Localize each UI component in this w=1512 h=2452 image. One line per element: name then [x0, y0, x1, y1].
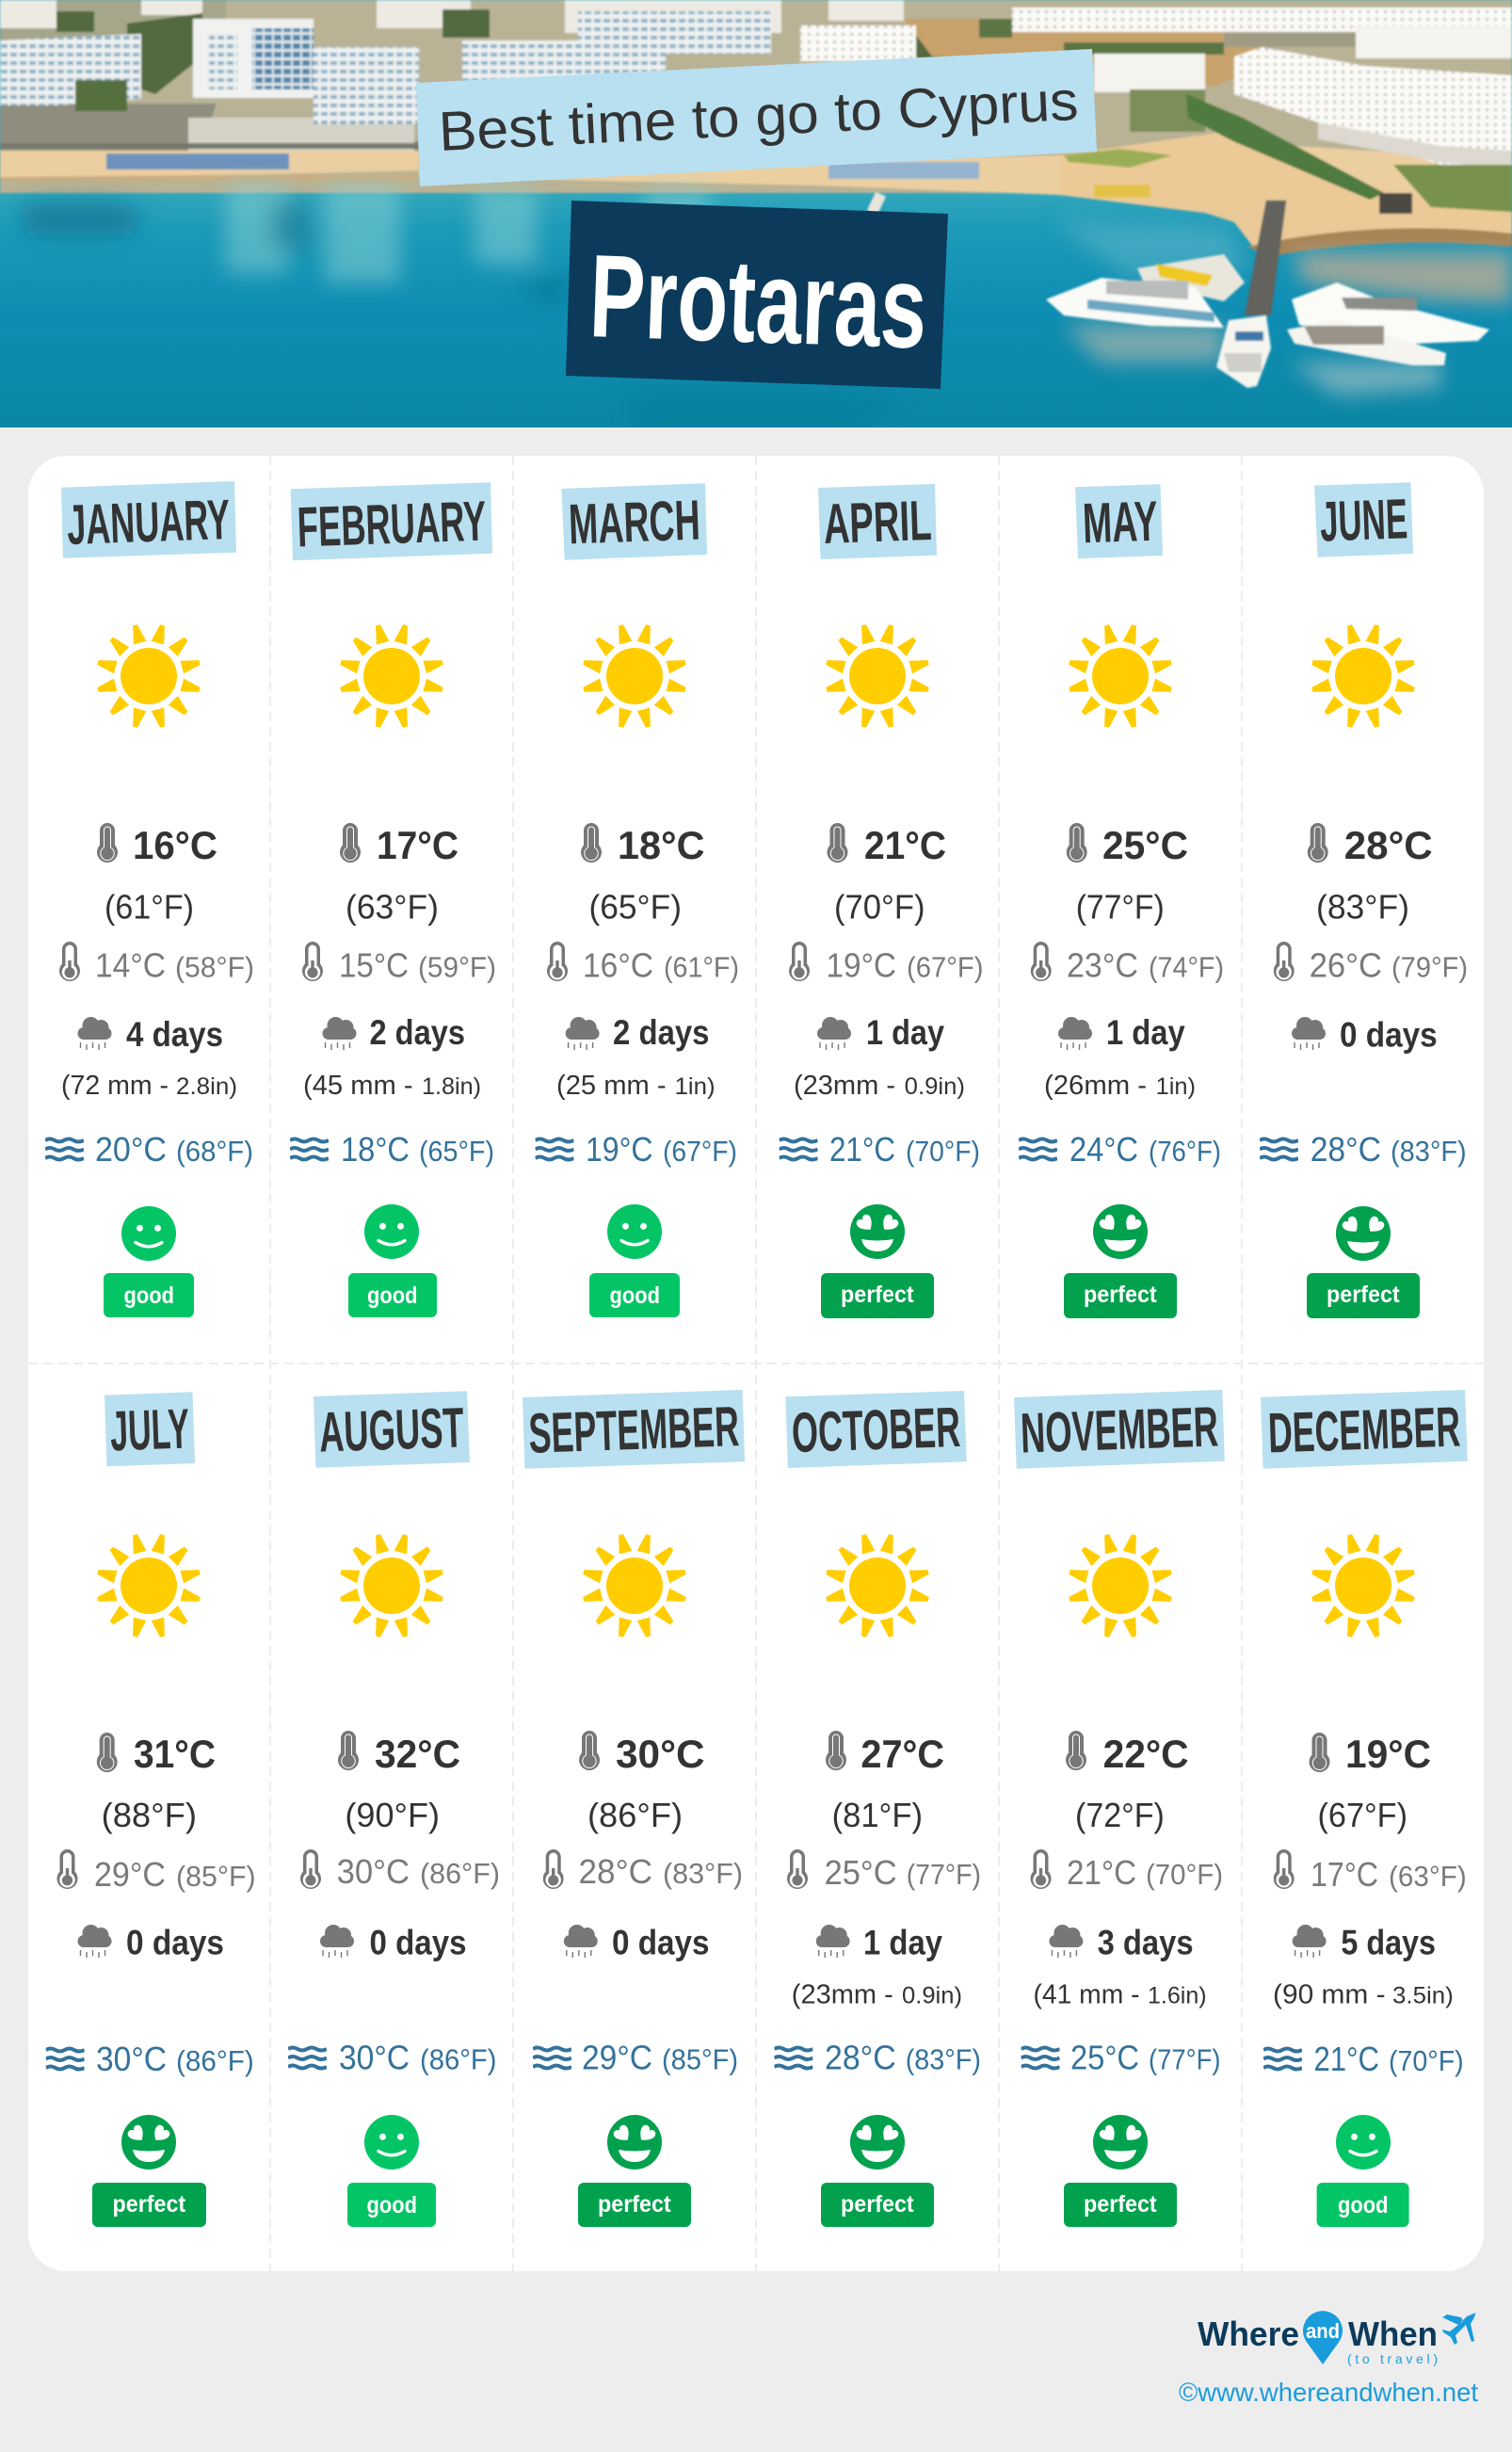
rating: perfect — [1064, 2115, 1177, 2227]
high temperature — [827, 823, 946, 927]
icon: sun — [582, 1533, 687, 1638]
rainfall: (45 mm - — [303, 1071, 413, 1101]
month heading — [1314, 482, 1413, 557]
month: August — [288, 1391, 500, 2227]
rainfall: 1.6in) — [1148, 1983, 1207, 2009]
sea temperature — [290, 1130, 494, 1169]
sea temperature: (65°F) — [419, 1135, 494, 1168]
high temperature: (65°F) — [589, 887, 682, 927]
month heading: APRIL — [823, 489, 933, 556]
rating: good — [589, 1204, 680, 1317]
sea temperature — [535, 1130, 737, 1169]
sea temperature: (76°F) — [1149, 1135, 1221, 1168]
sea temperature: 29°C — [582, 2039, 652, 2077]
sea temperature — [1019, 1130, 1221, 1169]
low temperature: (67°F) — [907, 951, 983, 983]
low temperature: (74°F) — [1149, 951, 1224, 983]
icon: sun — [825, 623, 930, 729]
rainfall: 5 days — [1341, 1924, 1436, 1962]
rating: perfect — [821, 1204, 934, 1318]
sea temperature: (83°F) — [1391, 1135, 1467, 1168]
month heading — [818, 484, 937, 559]
month heading: NOVEMBER — [1020, 1395, 1219, 1465]
month: April — [780, 484, 983, 1318]
month heading — [61, 481, 236, 558]
high temperature — [1308, 823, 1433, 927]
high temperature: (77°F) — [1076, 887, 1165, 927]
icon: airplane — [1442, 2313, 1476, 2345]
icon: sun — [1068, 623, 1173, 729]
icon: sun — [1311, 623, 1416, 729]
month heading — [314, 1391, 470, 1468]
header photo: Protaras bay — [0, 0, 1512, 427]
low temperature — [59, 942, 254, 985]
low temperature: (83°F) — [663, 1857, 743, 1890]
month heading — [1075, 484, 1163, 558]
month: June — [1260, 482, 1468, 1318]
sea temperature — [774, 2039, 981, 2077]
low temperature: (61°F) — [664, 951, 739, 983]
sea temperature: (85°F) — [662, 2043, 738, 2076]
rainfall: 1.8in) — [422, 1073, 481, 1100]
high temperature — [1066, 1731, 1189, 1834]
month heading: OCTOBER — [791, 1395, 961, 1464]
rating: good — [104, 1206, 194, 1317]
month: May — [1019, 484, 1224, 1318]
rainfall: 2.8in) — [176, 1073, 237, 1100]
low temperature: (77°F) — [907, 1858, 981, 1891]
logo: Where and When to travel: Where — [1198, 2315, 1299, 2353]
low temperature — [543, 1849, 743, 1891]
high temperature — [1309, 1732, 1431, 1834]
low temperature: 16°C — [583, 945, 653, 985]
icon: sun — [96, 623, 201, 729]
rainfall: (26mm - — [1044, 1071, 1147, 1101]
month heading: JULY — [109, 1397, 190, 1462]
rainfall: 2 days — [369, 1013, 465, 1052]
high temperature — [579, 1731, 705, 1834]
logo: Where and When to travel: (to travel) — [1347, 2351, 1438, 2366]
rainfall: 4 days — [126, 1015, 223, 1054]
rainfall: (41 mm - — [1034, 1980, 1139, 2010]
high temperature: 21°C — [864, 823, 946, 867]
icon: sun — [339, 1533, 444, 1638]
high temperature: (83°F) — [1316, 887, 1409, 927]
low temperature — [302, 942, 496, 985]
month: November — [1014, 1390, 1225, 2227]
high temperature: (90°F) — [345, 1796, 440, 1834]
high temperature: 22°C — [1103, 1732, 1189, 1776]
rainfall: 3 days — [1098, 1924, 1194, 1962]
sea temperature — [288, 2039, 497, 2077]
rainfall: 0 days — [369, 1924, 467, 1962]
rainfall: 0.9in) — [905, 1073, 965, 1100]
sea temperature: 30°C — [339, 2039, 410, 2077]
rainfall: 0 days — [612, 1924, 710, 1962]
low temperature: (85°F) — [176, 1860, 256, 1893]
low temperature — [787, 1849, 981, 1892]
rainfall: (25 mm - — [556, 1071, 667, 1101]
rainfall — [1292, 1016, 1438, 1055]
month heading: JUNE — [1319, 487, 1408, 554]
sea temperature: (86°F) — [420, 2043, 497, 2076]
sea temperature — [45, 1130, 253, 1169]
rating: perfect: perfect — [841, 2191, 914, 2218]
low temperature: 25°C — [825, 1853, 897, 1892]
low temperature — [1030, 1849, 1223, 1892]
title text: Best time to go to Cyprus — [437, 70, 1080, 163]
rainfall — [1044, 1013, 1196, 1101]
sea temperature: 24°C — [1070, 1130, 1138, 1169]
month heading: SEPTEMBER — [527, 1395, 740, 1465]
high temperature — [338, 1731, 460, 1834]
rainfall: 1 day — [866, 1013, 944, 1052]
high temperature: 18°C — [618, 823, 704, 867]
month heading — [561, 483, 707, 560]
rating: perfect: perfect — [1084, 1282, 1157, 1308]
rating: perfect: perfect — [598, 2191, 671, 2218]
icon: sun — [582, 623, 687, 729]
month heading: MAY — [1082, 490, 1159, 555]
low temperature: 28°C — [578, 1852, 652, 1891]
rating: perfect: perfect — [1084, 2191, 1157, 2218]
low temperature — [1031, 942, 1224, 985]
low temperature — [1274, 942, 1468, 985]
high temperature: 28°C — [1344, 823, 1433, 867]
low temperature — [1274, 1849, 1467, 1894]
sea temperature — [780, 1130, 980, 1169]
sea temperature: 30°C — [96, 2040, 167, 2078]
high temperature — [826, 1731, 944, 1834]
sea temperature: 19°C — [586, 1130, 653, 1169]
month heading: JANUARY — [66, 488, 231, 557]
month heading: MARCH — [568, 489, 701, 556]
rainfall: (72 mm - — [61, 1071, 169, 1101]
rainfall — [303, 1013, 481, 1101]
low temperature: 17°C — [1311, 1855, 1378, 1894]
high temperature: (88°F) — [102, 1796, 197, 1834]
rainfall: 1in) — [675, 1073, 716, 1100]
low temperature: (70°F) — [1146, 1858, 1223, 1891]
low temperature: (58°F) — [175, 951, 254, 983]
rating: good: good — [124, 1282, 174, 1309]
location banner — [566, 201, 948, 389]
sea temperature — [533, 2039, 738, 2077]
rating: good — [1317, 2115, 1409, 2227]
low temperature: (59°F) — [418, 951, 496, 983]
month: July — [46, 1392, 256, 2227]
rainfall — [564, 1924, 710, 1962]
sea temperature: (67°F) — [663, 1135, 737, 1168]
month: October — [774, 1391, 981, 2227]
rainfall — [556, 1013, 716, 1101]
sea temperature: 21°C — [829, 1130, 895, 1169]
rainfall: 0 days — [126, 1924, 224, 1962]
month heading: FEBRUARY — [297, 490, 487, 558]
rainfall — [77, 1924, 224, 1962]
rainfall: 1in) — [1156, 1073, 1196, 1100]
rainfall: (23mm - — [792, 1980, 893, 2010]
rating: good: good — [610, 1282, 660, 1309]
low temperature: 19°C — [827, 945, 896, 985]
icon: map pin: and — [1306, 2319, 1340, 2343]
rainfall — [320, 1924, 467, 1962]
sea temperature: 18°C — [341, 1130, 410, 1169]
high temperature: (81°F) — [832, 1796, 923, 1834]
rainfall: 3.5in) — [1392, 1983, 1454, 2009]
logo: Where and When to travel — [1198, 2311, 1476, 2366]
rainfall: (90 mm - — [1273, 1980, 1386, 2010]
low temperature: (79°F) — [1391, 951, 1468, 983]
sea temperature: (70°F) — [1389, 2044, 1464, 2077]
icon: map pin — [1303, 2311, 1343, 2364]
rainfall — [61, 1015, 237, 1101]
high temperature — [1067, 823, 1188, 927]
icon: sun — [825, 1533, 930, 1638]
sea temperature — [46, 2040, 254, 2078]
rainfall: 0 days — [1340, 1016, 1438, 1055]
sea temperature: 28°C — [1311, 1130, 1381, 1169]
sea temperature: (77°F) — [1149, 2043, 1220, 2076]
rainfall — [792, 1924, 962, 2010]
icon: sun — [1311, 1533, 1416, 1638]
high temperature: 31°C — [134, 1732, 216, 1776]
sea temperature: (68°F) — [176, 1135, 253, 1168]
location name: Protaras — [587, 231, 929, 373]
high temperature — [97, 823, 217, 927]
rainfall: 1 day — [863, 1924, 942, 1962]
month heading — [1014, 1390, 1225, 1469]
sea temperature: (83°F) — [906, 2043, 981, 2076]
rainfall — [794, 1013, 965, 1101]
logo: Where and When to travel: When — [1348, 2315, 1438, 2353]
sea temperature — [1263, 2040, 1464, 2078]
low temperature: (63°F) — [1389, 1860, 1467, 1893]
month heading — [523, 1390, 745, 1469]
month heading — [291, 482, 492, 560]
rating: perfect: perfect — [1327, 1282, 1400, 1308]
low temperature: 29°C — [94, 1855, 166, 1894]
month: February — [290, 482, 496, 1317]
rating: perfect — [1064, 1204, 1177, 1318]
low temperature: 14°C — [95, 945, 166, 985]
rating: good — [347, 2115, 436, 2227]
sea temperature: 25°C — [1070, 2039, 1139, 2077]
low temperature: 23°C — [1067, 945, 1138, 985]
sea temperature: 28°C — [825, 2039, 896, 2077]
sea temperature: 21°C — [1314, 2040, 1379, 2078]
high temperature: (61°F) — [105, 887, 194, 927]
high temperature: (86°F) — [587, 1796, 683, 1834]
rating: perfect — [1307, 1206, 1420, 1318]
high temperature: 16°C — [133, 823, 217, 867]
high temperature: 25°C — [1102, 823, 1188, 867]
month heading: AUGUST — [318, 1395, 465, 1464]
icon: sun — [1068, 1533, 1173, 1638]
month: January — [45, 481, 254, 1317]
high temperature — [97, 1732, 216, 1834]
panel: monthly calendar — [28, 456, 1484, 2271]
rainfall: 1 day — [1106, 1013, 1185, 1052]
month heading — [105, 1392, 195, 1466]
low temperature: 21°C — [1067, 1853, 1136, 1892]
high temperature: 19°C — [1345, 1732, 1431, 1776]
low temperature: (86°F) — [420, 1857, 500, 1890]
rating: perfect — [578, 2115, 691, 2227]
low temperature — [547, 942, 739, 985]
rainfall: 2 days — [613, 1013, 710, 1052]
rating: good: good — [367, 1282, 418, 1309]
month: December — [1261, 1390, 1468, 2227]
high temperature: 17°C — [377, 823, 458, 867]
rating: good: good — [367, 2192, 417, 2218]
sea temperature: (70°F) — [906, 1135, 980, 1168]
month: September — [523, 1390, 745, 2227]
sea temperature — [1260, 1130, 1467, 1169]
rating: good — [348, 1204, 437, 1317]
month heading — [785, 1391, 967, 1468]
low temperature: 26°C — [1310, 945, 1382, 985]
high temperature: (63°F) — [346, 887, 439, 927]
high temperature: 30°C — [616, 1732, 705, 1776]
rating: perfect — [821, 2115, 934, 2227]
low temperature: 15°C — [339, 945, 409, 985]
rating: perfect: perfect — [113, 2191, 186, 2218]
rating: perfect: perfect — [841, 1282, 914, 1308]
high temperature: 32°C — [375, 1732, 460, 1776]
rainfall — [1273, 1924, 1454, 2010]
low temperature — [789, 942, 983, 985]
high temperature: 27°C — [861, 1732, 944, 1776]
title banner — [416, 49, 1097, 186]
rainfall: (23mm - — [794, 1071, 895, 1101]
icon: sun — [339, 623, 444, 729]
high temperature — [340, 823, 458, 927]
sea temperature — [1021, 2039, 1220, 2077]
sea temperature: (86°F) — [176, 2044, 254, 2077]
rainfall — [1034, 1924, 1207, 2010]
low temperature — [300, 1849, 500, 1891]
high temperature: (70°F) — [834, 887, 925, 927]
low temperature — [56, 1849, 256, 1894]
rating: good: good — [1338, 2192, 1388, 2218]
month: March — [535, 483, 739, 1317]
sea temperature: 20°C — [95, 1130, 167, 1169]
low temperature: 30°C — [337, 1852, 410, 1891]
website credit: ©www.whereandwhen.net — [1179, 2378, 1478, 2407]
high temperature: (72°F) — [1075, 1796, 1165, 1834]
high temperature: (67°F) — [1318, 1796, 1407, 1834]
high temperature — [581, 823, 704, 927]
rainfall: 0.9in) — [902, 1983, 962, 2009]
rating: perfect — [92, 2115, 206, 2227]
icon: sun — [96, 1533, 201, 1638]
